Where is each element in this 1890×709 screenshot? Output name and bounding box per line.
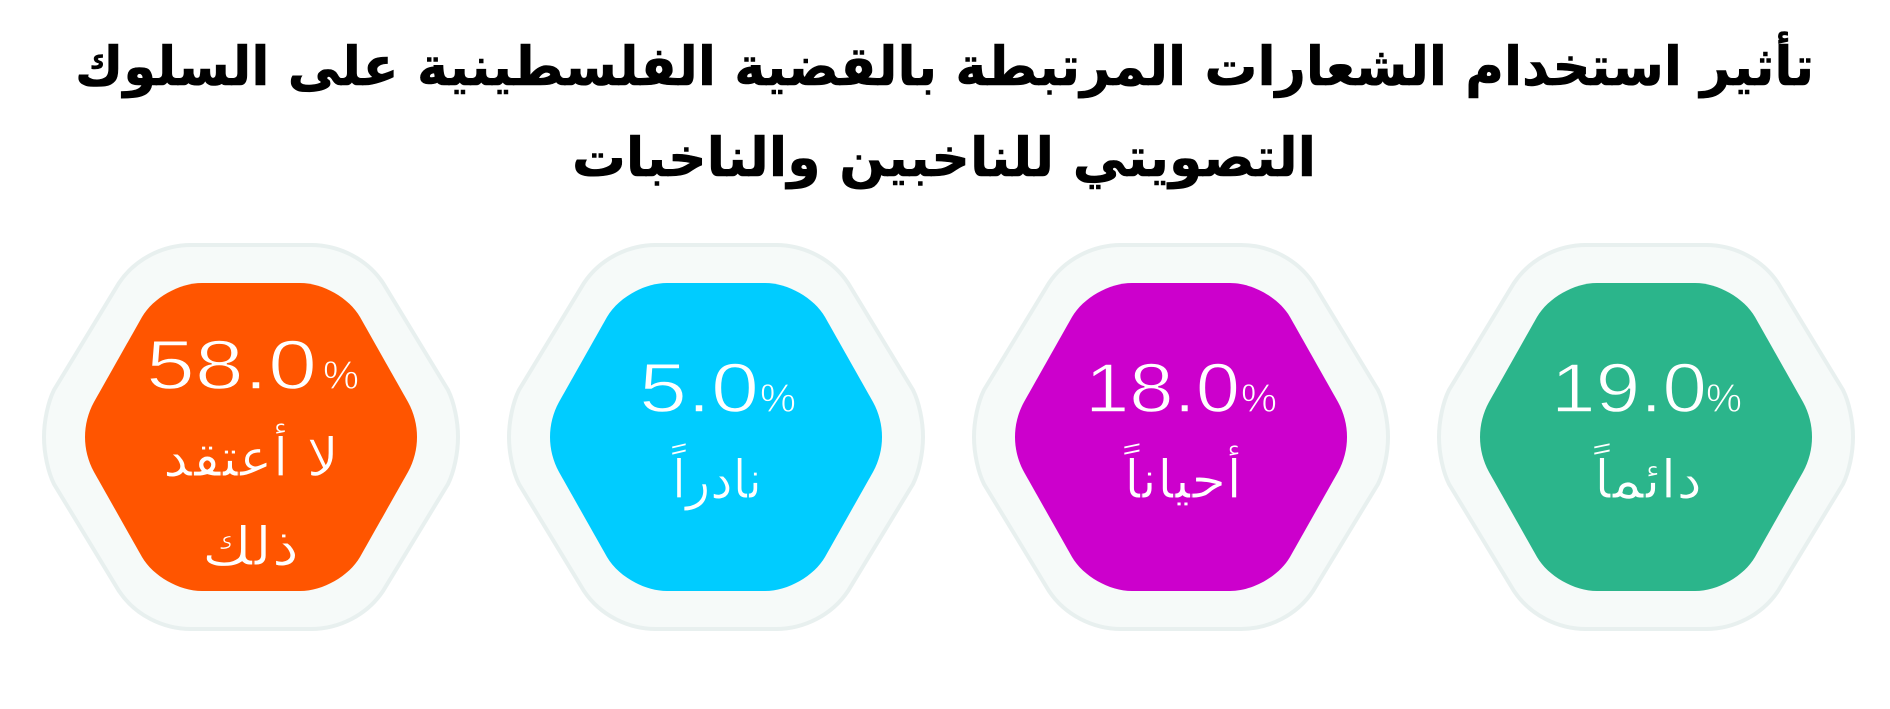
- value: %: [1241, 377, 1277, 421]
- value: 18.0: [1085, 349, 1240, 427]
- title: التصويتي للناخبين والناخبات: [572, 126, 1316, 189]
- panel: I don't think so 58.0%: [44, 245, 458, 629]
- value: 58.0: [146, 326, 317, 404]
- label: ذلك: [202, 517, 299, 578]
- outer hexagon: [974, 245, 1388, 629]
- value: 19.0: [1551, 349, 1707, 427]
- panel: sometimes 18.0%: [974, 245, 1388, 629]
- inner hexagon: [550, 283, 882, 591]
- value: [146, 326, 359, 404]
- value: [639, 349, 796, 427]
- outer hexagon: [509, 245, 923, 629]
- label: نادراً: [671, 442, 762, 511]
- title: تأثير استخدام الشعارات المرتبطة بالقضية الفلسطينية على السلوك: [75, 31, 1814, 98]
- value: 5.0: [639, 349, 759, 427]
- value: %: [323, 354, 359, 398]
- panel: rarely 5.0%: [509, 245, 923, 629]
- inner hexagon: [85, 283, 417, 591]
- inner hexagon: [1015, 283, 1347, 591]
- value: %: [760, 377, 796, 421]
- panel: always 19.0%: [1439, 245, 1853, 629]
- label: دائماً: [1593, 442, 1702, 511]
- inner hexagon: [1480, 283, 1812, 591]
- label: [163, 423, 339, 578]
- title: [75, 31, 1814, 189]
- label: أحياناً: [1123, 442, 1242, 511]
- value: %: [1706, 377, 1742, 421]
- outer hexagon: [1439, 245, 1853, 629]
- label: لا أعتقد: [163, 423, 339, 489]
- outer hexagon: [44, 245, 458, 629]
